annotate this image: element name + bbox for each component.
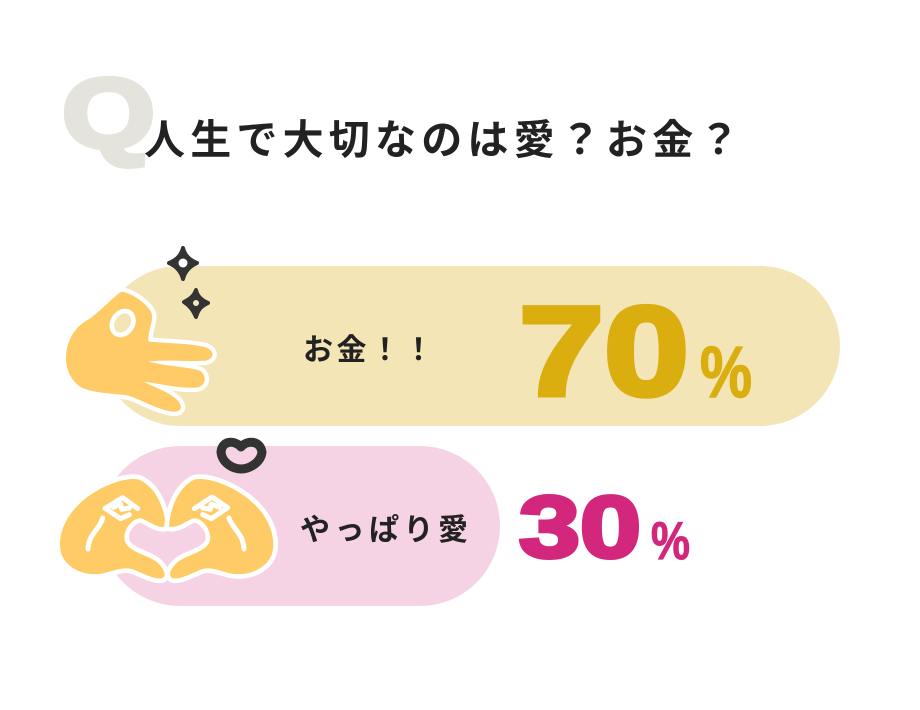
value: 70%: 70 (519, 280, 689, 422)
panel: love bar (60, 442, 690, 606)
panel: money bar (66, 248, 840, 426)
label: love: やっぱり愛 (300, 514, 472, 547)
icon: small heart (221, 442, 262, 469)
value: 30%: 30 (519, 479, 641, 576)
question title: 人生で大切なのは愛？お金？ (144, 117, 745, 163)
value: 30% (519, 479, 690, 576)
label: money: お金！！ (303, 334, 437, 367)
large Q mark: Q (62, 58, 155, 168)
bar background (100, 446, 500, 606)
bar background (100, 266, 840, 426)
value: 70% (519, 280, 752, 422)
heading (62, 58, 745, 168)
icon: OK hand (66, 292, 212, 412)
value: 30%: % (651, 512, 690, 571)
icon: heart hands (60, 479, 273, 578)
value: 70%: % (700, 333, 752, 413)
icon: sparkles (169, 248, 208, 317)
